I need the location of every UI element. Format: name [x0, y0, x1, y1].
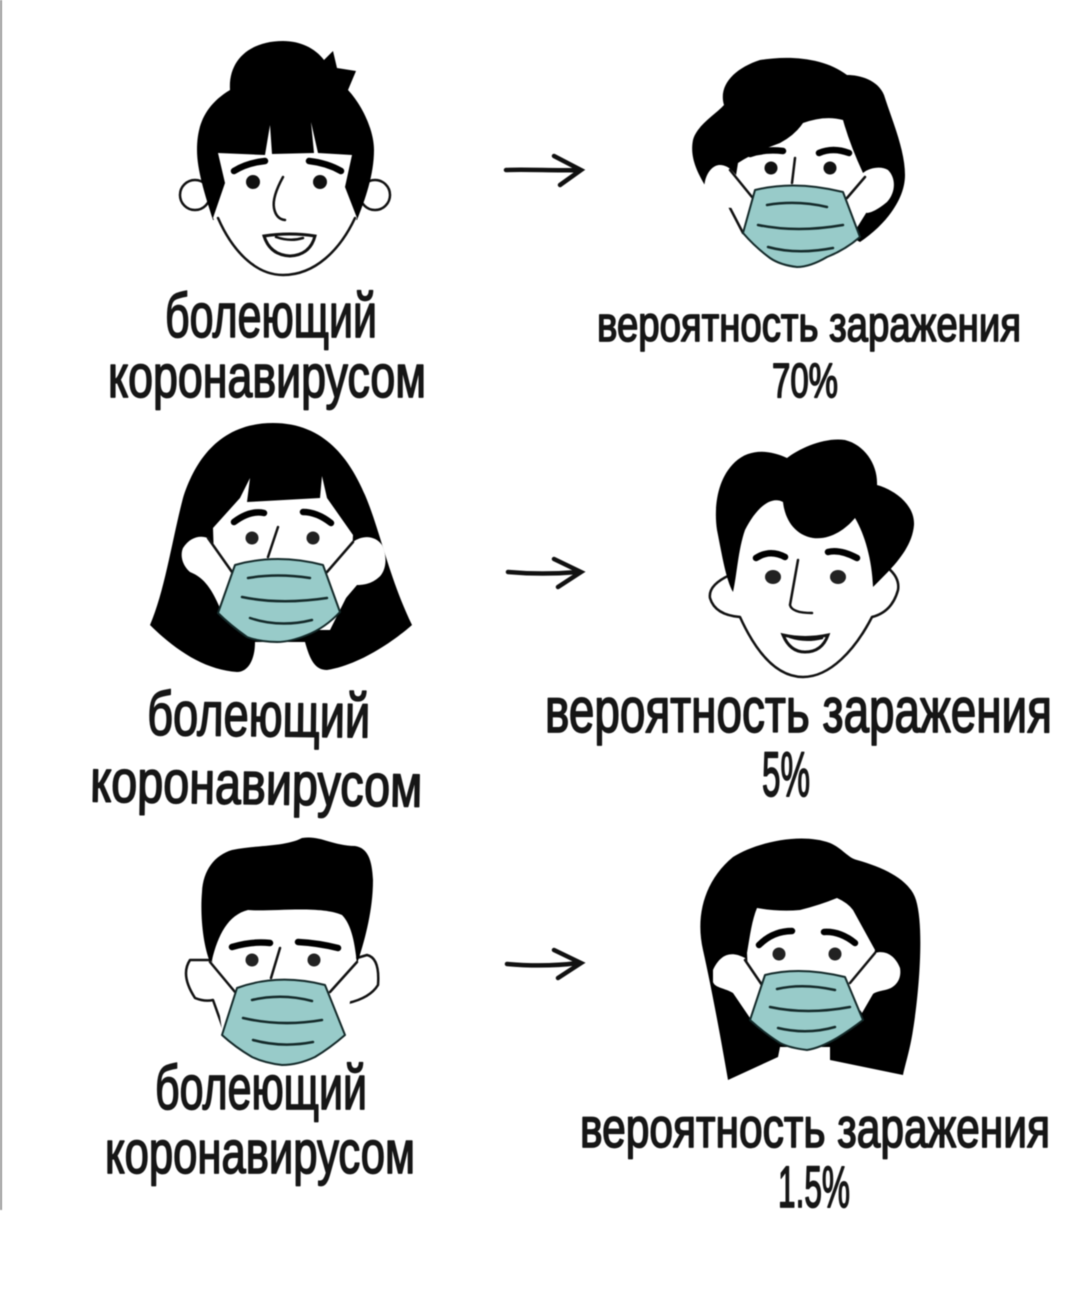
text: sick with coronavirus: болеющий: [155, 1054, 367, 1123]
text: infection probability 70%: [597, 298, 1021, 408]
row 2: sick masked woman to unmasked man, 5%: [90, 423, 1052, 820]
text: sick with coronavirus: коронавирусом: [108, 343, 426, 410]
text: sick with coronavirus: болеющий: [165, 282, 377, 351]
face: sick woman with mask: [150, 423, 412, 672]
face: masked woman: [700, 839, 920, 1080]
arrow: [508, 559, 581, 587]
text: sick with coronavirus: [90, 680, 423, 820]
face: man without mask: [710, 439, 914, 677]
text: sick with coronavirus: болеющий: [147, 680, 371, 751]
arrow: [507, 950, 581, 978]
text: infection probability 5%: [545, 676, 1052, 810]
arrow: [506, 156, 581, 185]
row 1: sick unmasked woman to masked man, 70%: [108, 41, 1021, 410]
face: sick woman without mask: [180, 41, 390, 275]
text: infection probability 1.5%: [580, 1096, 1050, 1220]
text: sick with coronavirus: коронавирусом: [90, 747, 423, 820]
face: sick man with mask: [186, 837, 378, 1065]
text: infection probability 70%: 70%: [772, 355, 838, 408]
text: sick with coronavirus: [108, 282, 426, 410]
text: infection probability 5%: 5%: [762, 740, 810, 810]
text: infection probability 1.5%: 1.5%: [778, 1155, 850, 1220]
text: sick with coronavirus: коронавирусом: [105, 1119, 415, 1186]
text: sick with coronavirus: [105, 1054, 415, 1186]
row 3: sick masked man to masked woman, 1.5%: [105, 837, 1050, 1220]
face: masked man: [692, 58, 905, 267]
